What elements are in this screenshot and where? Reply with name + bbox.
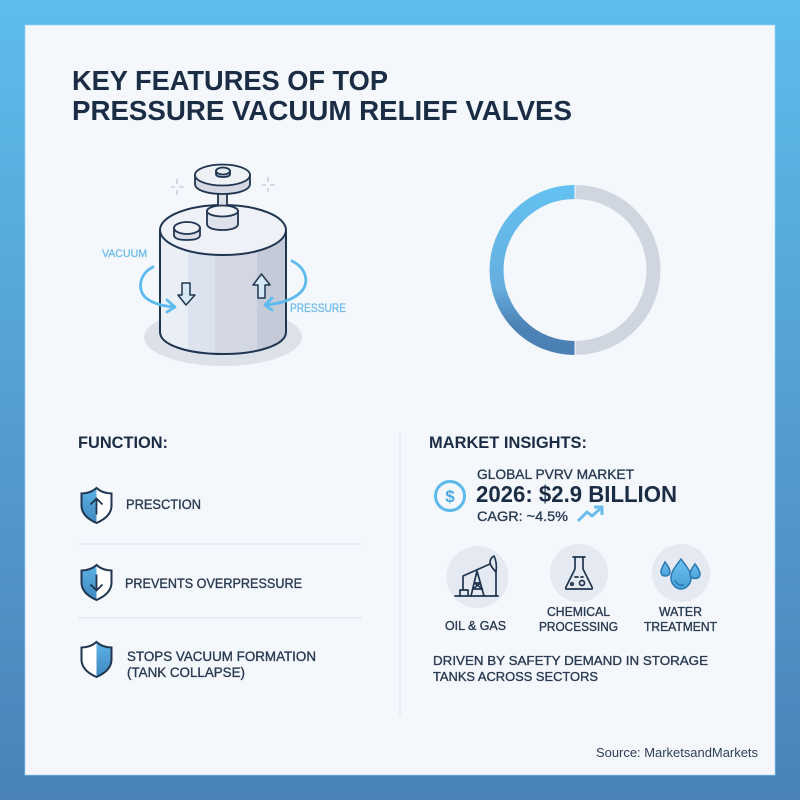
illustration: tank with relief valve bbox=[102, 164, 346, 366]
text: market driver bbox=[433, 653, 708, 684]
icon: flask bbox=[566, 557, 592, 589]
label: water treatment bbox=[644, 605, 717, 634]
icon: shield up bbox=[82, 488, 112, 523]
valve neck and stem bbox=[207, 190, 238, 230]
icon: water drops bbox=[661, 559, 700, 589]
small cap bbox=[174, 222, 200, 240]
arrow: vacuum bbox=[141, 267, 175, 312]
text: market value: 2026: $2.9 BILLION bbox=[476, 481, 677, 507]
sector: oil and gas bbox=[445, 546, 508, 633]
tank body bbox=[160, 205, 286, 355]
icon: shield down bbox=[82, 565, 112, 600]
text: global market: GLOBAL PVRV MARKET bbox=[477, 466, 634, 482]
label: vacuum: VACUUM bbox=[102, 248, 147, 260]
text: market driver: TANKS ACROSS SECTORS bbox=[433, 669, 598, 684]
label: chemical processing: PROCESSING bbox=[539, 620, 618, 634]
heading: function: FUNCTION: bbox=[78, 433, 168, 452]
source: Source: MarketsandMarkets bbox=[596, 745, 758, 760]
text: stops vacuum formation: (TANK COLLAPSE) bbox=[127, 665, 245, 680]
valve disc bbox=[195, 164, 250, 194]
text: stops vacuum formation bbox=[127, 649, 316, 680]
text: cagr: CAGR: ~4.5% bbox=[477, 508, 568, 524]
tank shadow bbox=[144, 308, 302, 366]
text: protection: PRESCTION bbox=[126, 497, 201, 512]
icon: pump jack bbox=[455, 556, 498, 596]
label: pressure: PRESSURE bbox=[290, 303, 346, 315]
title: KEY FEATURES OF TOP bbox=[72, 65, 388, 96]
icon: down arrow bbox=[178, 283, 195, 305]
title bbox=[72, 65, 572, 126]
label: oil and gas: OIL & GAS bbox=[445, 619, 506, 633]
arrow: pressure bbox=[265, 261, 306, 310]
text: prevents overpressure: PREVENTS OVERPRESSURE bbox=[125, 576, 302, 591]
label: water treatment: TREATMENT bbox=[644, 620, 717, 634]
sparkles bbox=[171, 177, 275, 195]
text: stops vacuum formation: STOPS VACUUM FORMATION bbox=[127, 649, 316, 664]
icon: up arrow bbox=[253, 274, 270, 298]
icon: trend arrow bbox=[578, 507, 602, 521]
sector: water treatment bbox=[644, 544, 717, 634]
icon: dollar: $ bbox=[445, 487, 455, 506]
text: market driver: DRIVEN BY SAFETY DEMAND IN STORAGE bbox=[433, 653, 708, 668]
label: chemical processing: CHEMICAL bbox=[547, 605, 610, 619]
sector: chemical processing bbox=[539, 544, 618, 634]
label: water treatment: WATER bbox=[659, 605, 702, 619]
panel: market figure bbox=[436, 466, 677, 524]
heading: market insights: MARKET INSIGHTS: bbox=[429, 433, 587, 452]
donut: remaining segment bbox=[576, 192, 653, 348]
donut: filled segment bbox=[497, 192, 574, 348]
icon: shield half bbox=[82, 642, 112, 677]
label: chemical processing bbox=[539, 605, 618, 634]
panel: function list bbox=[78, 488, 362, 680]
icon: dollar bbox=[436, 482, 464, 510]
donut chart bbox=[497, 192, 653, 348]
title: PRESSURE VACUUM RELIEF VALVES bbox=[72, 95, 572, 126]
